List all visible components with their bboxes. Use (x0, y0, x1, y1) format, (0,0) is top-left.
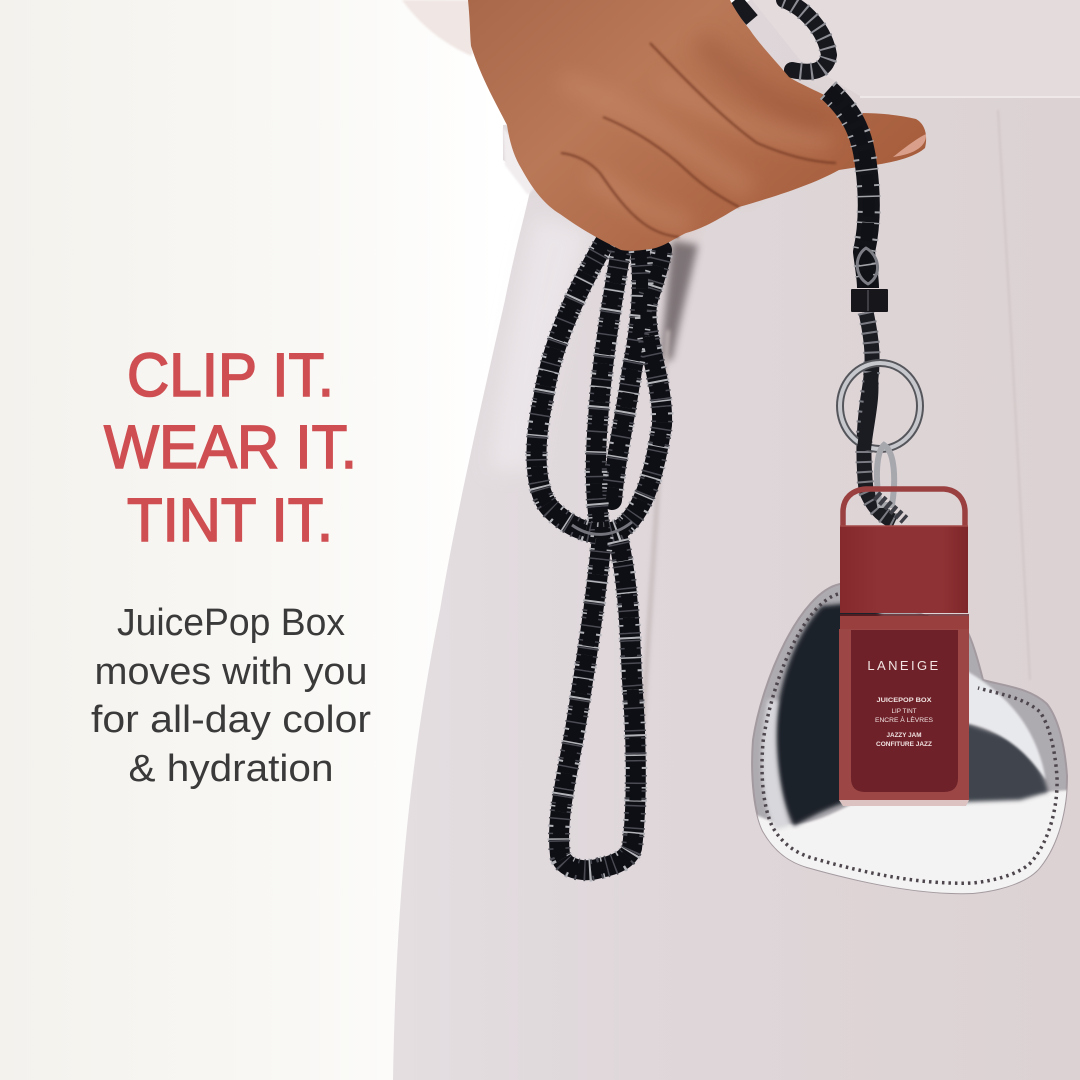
label (867, 658, 941, 748)
label: JUICEPOP BOX (876, 697, 932, 704)
lip tint product (839, 489, 969, 806)
hand highlights (560, 80, 830, 225)
handle loop (843, 489, 965, 526)
long fold crease (634, 330, 668, 860)
label: JAZZY JAM (886, 732, 922, 739)
finger creases (561, 43, 836, 237)
right chain over thumb and clasp (828, 90, 895, 522)
left chain strap loop (537, 240, 662, 870)
side seam (998, 110, 1030, 680)
chain over ring (864, 372, 871, 450)
label: LIP TINT (892, 708, 917, 715)
stitching (762, 594, 1057, 883)
headline: CLIP IT. (127, 341, 334, 409)
dark left reflection (776, 600, 880, 826)
clasp (851, 289, 888, 312)
bright lower reflection (750, 790, 1070, 900)
headline (104, 341, 357, 554)
cap (840, 526, 968, 613)
body (839, 629, 969, 800)
bright right reflection (969, 671, 1046, 780)
thumbnail (893, 134, 926, 157)
waistband (752, 0, 1080, 96)
fold shadow at top of strap (660, 240, 698, 360)
silver left sheen (762, 700, 790, 830)
headline: WEAR IT. (104, 413, 357, 481)
description text: moves with you (94, 651, 368, 693)
description text: JuicePop Box (117, 602, 345, 644)
tint inner (851, 630, 958, 792)
label: LANEIGE (867, 658, 941, 673)
description text: for all-day color (91, 699, 371, 741)
shirt sleeve above hand (402, 0, 480, 56)
skirt (393, 0, 1080, 1080)
belt tuck (503, 128, 545, 195)
hand (468, 0, 926, 251)
right chain behind hand (735, 0, 829, 72)
description text (91, 602, 371, 790)
metal link (877, 445, 894, 505)
collar (840, 616, 969, 630)
headline: TINT IT. (127, 486, 333, 554)
label: CONFITURE JAZZ (876, 741, 932, 748)
heart mirror charm (750, 584, 1070, 900)
label: ENCRE À LÈVRES (875, 715, 934, 724)
split ring (840, 363, 920, 520)
dark right reflection (962, 722, 1048, 802)
description text: & hydration (128, 748, 334, 790)
left panel highlight (490, 215, 590, 470)
